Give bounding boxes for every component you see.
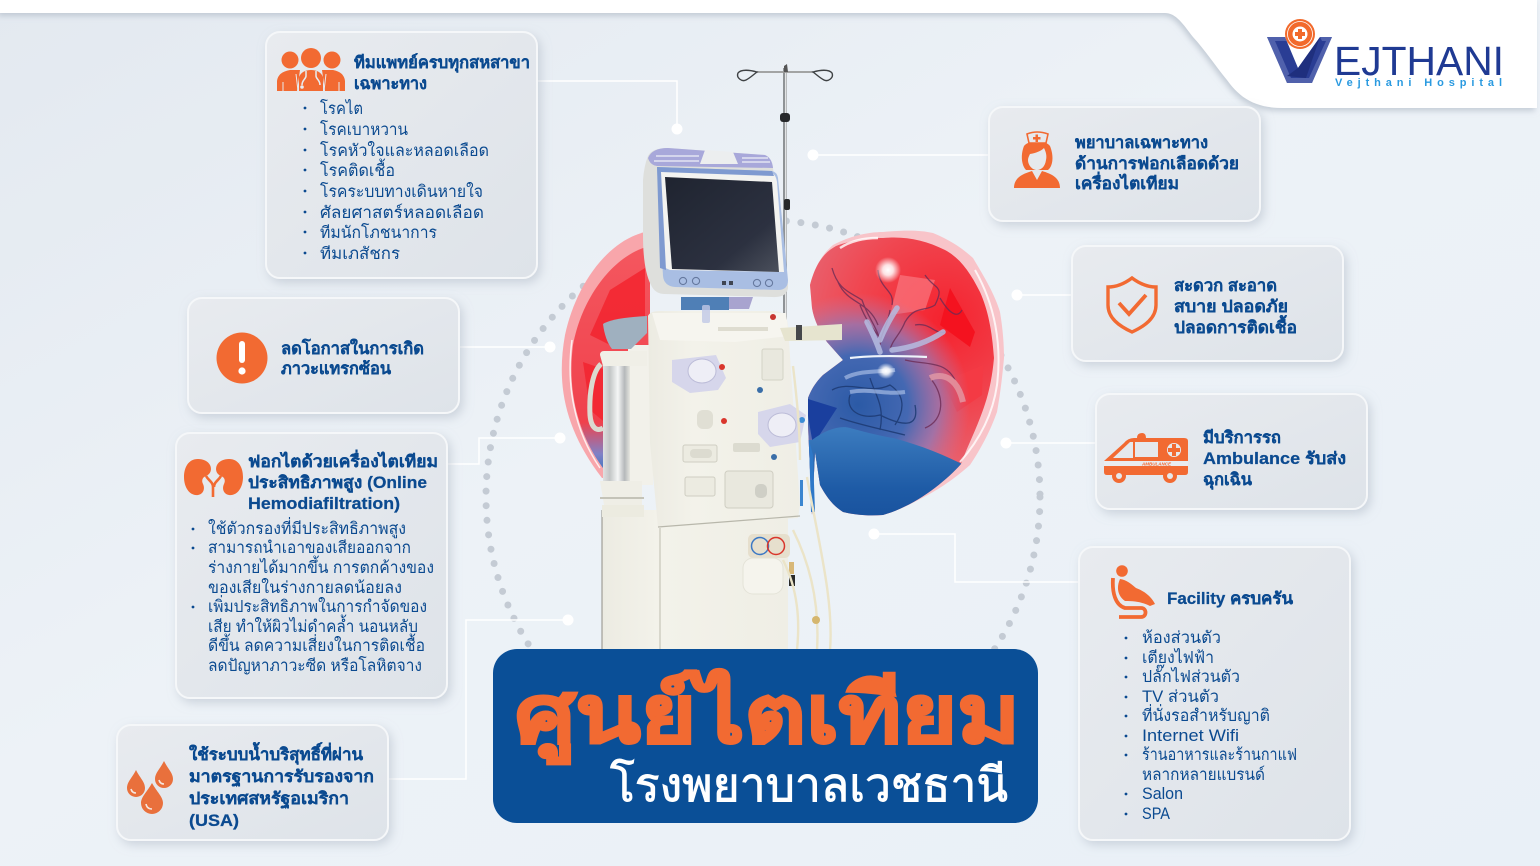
icon: water drops — [127, 761, 173, 814]
panel: online hemodiafiltration — [176, 433, 447, 698]
text — [281, 338, 424, 378]
list: หลากหลายแบรนด์ — [1142, 765, 1265, 784]
list: TV ส่วนตัว — [1142, 688, 1219, 706]
text: สะดวก สะอาด — [1174, 277, 1277, 295]
list: สามารถนำเอาของเสียออกจาก — [208, 539, 411, 557]
chamber — [748, 534, 790, 558]
top rail and clamp — [718, 327, 768, 331]
text: ลดโอกาสในการเกิด — [281, 338, 424, 358]
text: มีบริการรถ — [1203, 428, 1281, 447]
left kidney — [562, 232, 650, 478]
text: เครื่องไตเทียม — [1075, 171, 1179, 193]
list: ห้องส่วนตัว — [1142, 629, 1221, 647]
list — [304, 99, 489, 263]
list: เสีย ทำให้ผิวไม่ดำคล้ำ นอนหลับ — [208, 614, 418, 636]
panel: clean and safe — [1072, 246, 1343, 361]
icon: doctors — [277, 48, 345, 91]
list: ที่นั่งรอสำหรับญาติ — [1142, 704, 1270, 725]
text: ภาวะแทรกซ้อน — [281, 360, 392, 378]
list: เพิ่มประสิทธิภาพในการกำจัดของ — [208, 595, 427, 616]
panel: reduced complications — [188, 298, 459, 413]
panel: purified water — [117, 725, 388, 840]
list: ร่างกายได้มากขึ้น การตกค้างของ — [208, 555, 434, 577]
list: ลดปัญหาภาวะซีด หรือโลหิตจาง — [208, 656, 422, 675]
backing between column and body — [628, 345, 653, 485]
main title: ศูนย์ไตเทียม — [515, 668, 1020, 765]
list: โรคระบบทางเดินหายใจ — [320, 182, 483, 201]
monitor neck — [681, 297, 729, 310]
monitor screen — [665, 177, 779, 272]
monitor bezel — [657, 167, 788, 290]
text — [1075, 134, 1239, 193]
connector lines — [388, 81, 1096, 779]
logo: Vejthani Hospital — [1267, 19, 1504, 89]
logo wordmark: EJTHANI — [1334, 38, 1504, 84]
list: ทีมเภสัชกร — [320, 245, 400, 263]
panel: ambulance service — [1096, 394, 1367, 509]
icon: nurse — [1014, 132, 1060, 188]
heading: ทีมแพทย์ครบทุกสหสาขา — [354, 53, 530, 73]
white header band with logo tab — [0, 0, 1537, 108]
list: ทีมนักโภชนาการ — [320, 223, 437, 242]
subtitle: โรงพยาบาลเวชธานี — [610, 758, 1008, 811]
text: ปลอดการติดเชื้อ — [1174, 315, 1297, 337]
text — [189, 742, 374, 830]
icon: ambulance: AMBULANCE — [1141, 462, 1172, 466]
text — [1174, 277, 1297, 337]
logo sub-wordmark: Vejthani Hospital — [1335, 77, 1502, 89]
text: ด้านการฟอกเลือดด้วย — [1075, 154, 1239, 173]
text: Ambulance รับส่ง — [1203, 450, 1346, 468]
white lines — [850, 356, 927, 358]
list: โรคติดเชื้อ — [320, 158, 395, 180]
panel: medical specialists — [266, 32, 537, 278]
blue strip edge — [809, 440, 815, 512]
pumps — [672, 355, 726, 393]
text: มาตรฐานการรับรองจาก — [189, 768, 374, 787]
heading: เฉพาะทาง — [354, 75, 427, 93]
list: ศัลยศาสตร์หลอดเลือด — [320, 203, 484, 222]
heading — [248, 449, 438, 513]
list: ปลั๊กไฟส่วนตัว — [1142, 664, 1240, 686]
kidney inner shading — [808, 238, 994, 516]
tubing — [783, 366, 831, 650]
icon: ambulance — [1104, 433, 1188, 483]
right kidney — [808, 230, 1004, 516]
controls — [683, 349, 783, 508]
list — [192, 517, 434, 675]
panel: facilities — [1079, 547, 1350, 840]
icon: seated patient — [1113, 565, 1155, 617]
list: โรคหัวใจและหลอดเลือด — [320, 141, 489, 160]
pale vessels — [867, 308, 943, 352]
heading: ฟอกไตด้วยเครื่องไตเทียม — [248, 449, 438, 471]
text: ใช้ระบบน้ำบริสุทธิ์ที่ผ่าน — [189, 742, 364, 765]
list: SPA — [1142, 805, 1170, 823]
list: Internet Wifi — [1142, 727, 1239, 745]
list: ดีขึ้น ลดความเสี่ยงในการติดเชื้อ — [208, 633, 425, 655]
heading: Facility ครบครัน — [1167, 590, 1294, 608]
text — [1203, 428, 1346, 490]
kidney rim — [808, 231, 1004, 515]
grey handle pad — [603, 316, 647, 349]
list: ร้านอาหารและร้านกาแฟ — [1142, 746, 1297, 764]
veins — [832, 268, 962, 428]
panel: specialist nurses — [989, 107, 1260, 221]
text: ฉุกเฉิน — [1203, 470, 1253, 490]
icon: warning — [216, 332, 268, 384]
heading: Hemodiafiltration) — [248, 495, 400, 513]
text: พยาบาลเฉพาะทาง — [1075, 134, 1208, 152]
title plate — [493, 649, 1038, 823]
logo V mark — [1267, 37, 1332, 83]
medulla wedges — [940, 288, 975, 347]
monitor buttons — [679, 277, 773, 287]
dialysis machine — [590, 148, 842, 650]
heading — [354, 53, 530, 93]
logo orange cross badge — [1285, 19, 1315, 49]
list: เตียงไฟฟ้า — [1142, 648, 1214, 667]
heading: ประสิทธิภาพสูง (Online — [248, 473, 427, 494]
list: ใช้ตัวกรองที่มีประสิทธิภาพสูง — [208, 517, 406, 539]
monitor housing — [643, 148, 788, 297]
list: Salon — [1142, 785, 1183, 803]
IV pole — [738, 64, 832, 330]
list — [1125, 629, 1297, 823]
list: โรคเบาหวาน — [320, 120, 408, 139]
icon: shield check — [1108, 278, 1156, 332]
text: (USA) — [189, 812, 239, 830]
upper body — [648, 311, 800, 527]
lower column — [602, 510, 788, 650]
icon: kidneys — [184, 459, 243, 497]
dotted circle around the machine — [486, 220, 1040, 774]
lower blue cap — [808, 427, 962, 516]
text: ประเทศสหรัฐอเมริกา — [189, 789, 349, 809]
text: สบาย ปลอดภัย — [1174, 298, 1288, 316]
list: ของเสียในร่างกายลดน้อยลง — [208, 578, 402, 597]
list: โรคไต — [320, 99, 363, 118]
highlights — [875, 257, 901, 283]
chrome handle tube — [600, 351, 647, 481]
